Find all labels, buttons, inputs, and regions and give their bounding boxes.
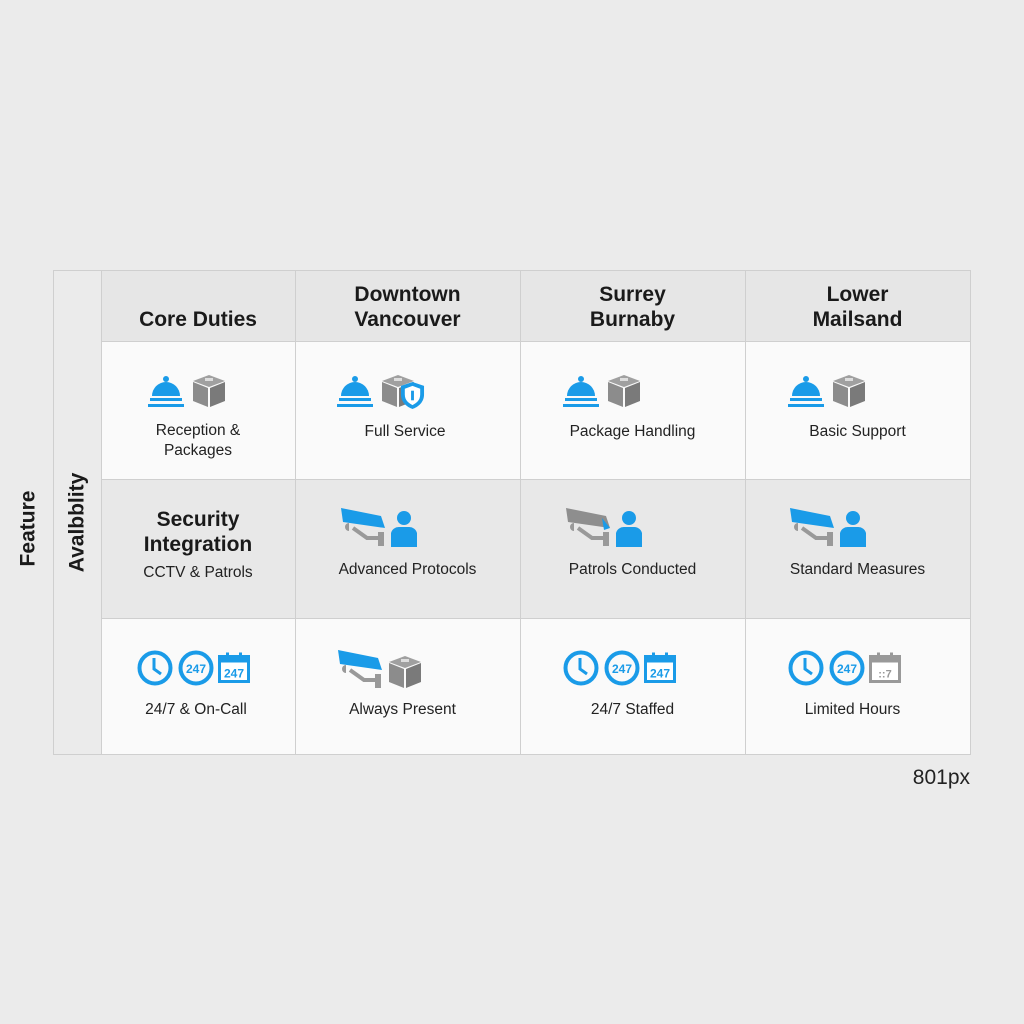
header: Core Duties: Core Duties xyxy=(139,308,257,331)
header: Surrey Burnaby: Burnaby xyxy=(590,308,675,331)
heading: Security Integration xyxy=(144,508,252,556)
header: Surrey Burnaby: Surrey xyxy=(599,283,666,306)
text: Advanced Protocols: Advanced Protocols xyxy=(339,561,476,578)
header: Surrey Burnaby xyxy=(590,283,675,331)
row1 col2 icons xyxy=(337,375,424,409)
header: Downtown Vancouver xyxy=(354,283,461,331)
text: Patrols Conducted: Patrols Conducted xyxy=(569,561,696,578)
row3 col3 icons xyxy=(564,650,676,686)
label: Avalbblity: Avalbblity xyxy=(66,473,88,572)
text: Reception & Packages: Reception & xyxy=(156,422,240,439)
row2 col2 icons xyxy=(341,508,417,547)
row3 col4 icons xyxy=(788,650,901,686)
header: Lower Mailsand xyxy=(813,283,902,331)
row3 col1 icons xyxy=(138,650,250,686)
row1 col1 icons xyxy=(148,375,225,407)
side column: Feature xyxy=(53,270,102,755)
row1 col3 icons xyxy=(563,375,640,407)
text: Always Present: Always Present xyxy=(349,701,456,718)
row3 col2 icons xyxy=(338,650,421,688)
label: Feature: Feature xyxy=(16,491,40,566)
row1 col4 icons xyxy=(788,375,865,407)
header: Downtown Vancouver: Vancouver xyxy=(354,308,461,331)
header: Lower Mailsand: Mailsand xyxy=(813,308,902,331)
heading: Security Integration: Security xyxy=(157,508,239,531)
row2 col3 icons xyxy=(566,508,642,547)
text: Full Service: Full Service xyxy=(365,423,445,440)
heading: Security Integration: Integration xyxy=(144,533,252,556)
text: CCTV & Patrols: CCTV & Patrols xyxy=(143,564,253,581)
text: Limited Hours: Limited Hours xyxy=(805,701,900,718)
text: 24/7 & On-Call: 24/7 & On-Call xyxy=(145,701,247,718)
text: Reception & Packages: Packages xyxy=(164,442,232,459)
table xyxy=(53,270,971,755)
text: Reception & Packages xyxy=(156,422,240,459)
text: 24/7 Staffed: 24/7 Staffed xyxy=(591,701,674,718)
header: Downtown Vancouver: Downtown xyxy=(354,283,461,306)
caption: 801px: 801px xyxy=(913,766,970,789)
text: Package Handling: Package Handling xyxy=(570,423,695,440)
text: Basic Support: Basic Support xyxy=(809,423,906,440)
row2 col4 icons xyxy=(790,508,866,547)
header: Lower Mailsand: Lower xyxy=(827,283,888,306)
row header strip xyxy=(101,270,971,342)
text: Standard Measures: Standard Measures xyxy=(790,561,925,578)
